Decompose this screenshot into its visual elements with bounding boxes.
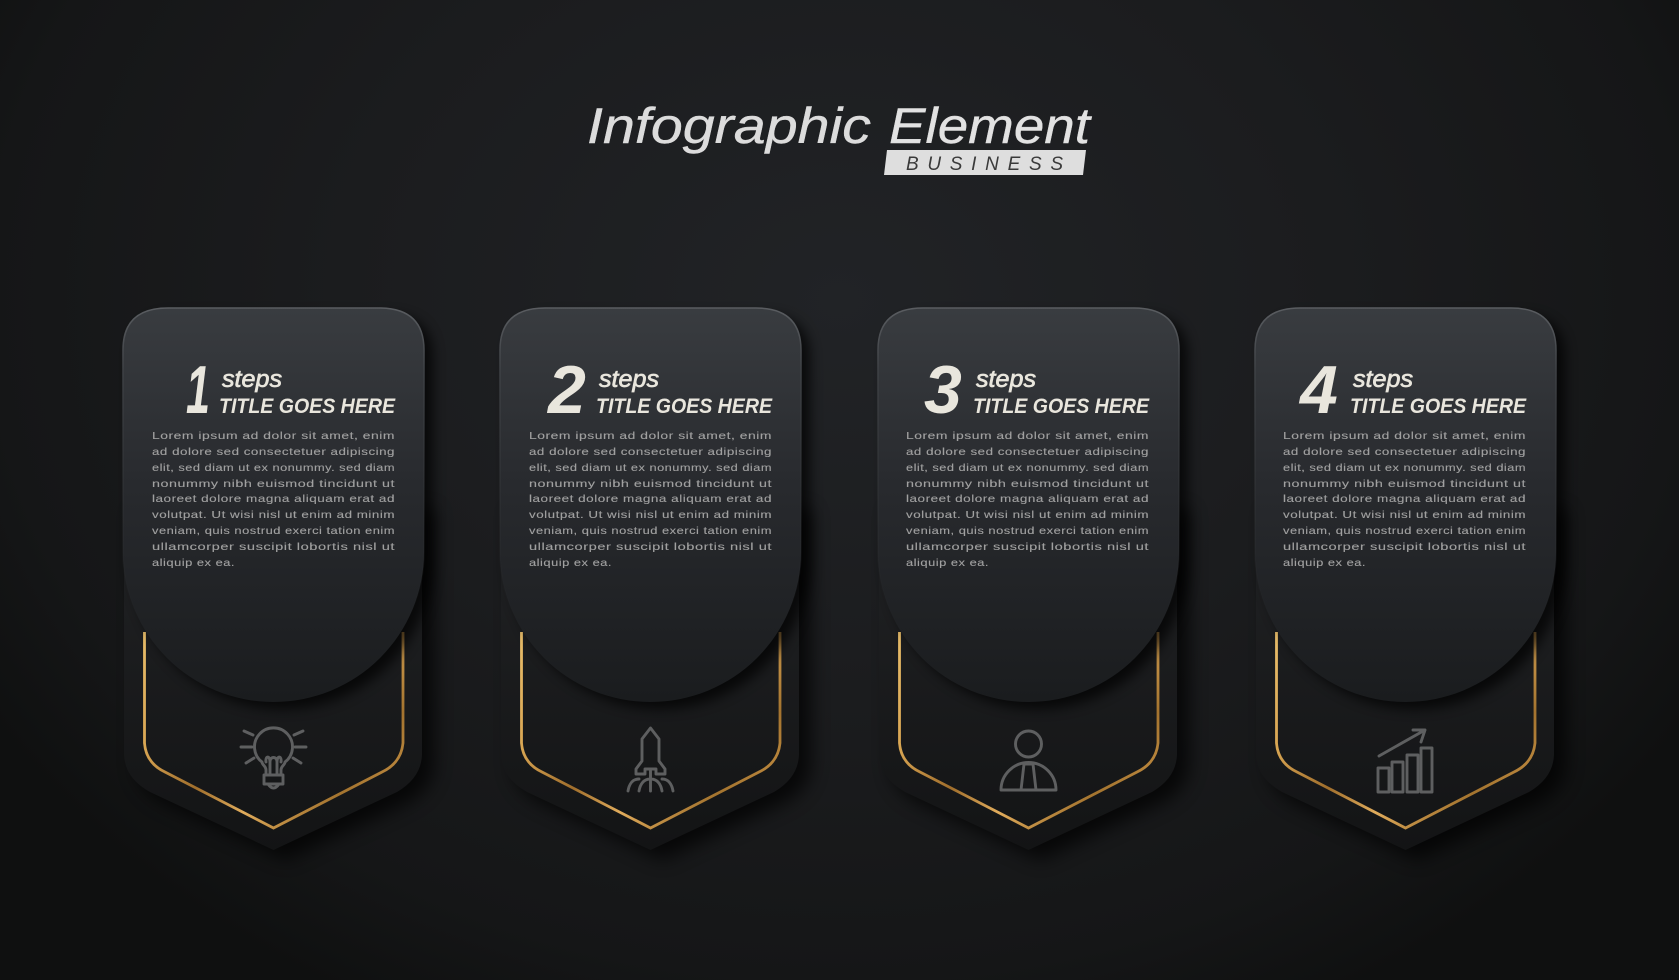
body text: ullamcorper suscipit lobortis nisl ut [529, 541, 772, 553]
body text: ullamcorper suscipit lobortis nisl ut [152, 541, 395, 553]
label: steps: steps [599, 366, 659, 393]
heading: title: TITLE GOES HERE [1350, 395, 1527, 418]
icon: rocket [628, 728, 673, 791]
body text: Lorem ipsum ad dolor sit amet, enim [906, 430, 1149, 442]
number 3: 3 [924, 352, 962, 428]
title: Element [889, 98, 1092, 154]
panel: step 1 [123, 308, 434, 860]
body text: ad dolore sed consectetuer adipiscing [1283, 446, 1526, 458]
body text [152, 430, 395, 569]
icon: business person [1001, 731, 1056, 790]
body text: nonummy nibh euismod tincidunt ut [906, 478, 1149, 490]
body text: laoreet dolore magna aliquam erat ad [529, 493, 772, 505]
body text: veniam, quis nostrud exerci tation enim [152, 525, 395, 537]
body text: veniam, quis nostrud exerci tation enim [529, 525, 772, 537]
body text: laoreet dolore magna aliquam erat ad [906, 493, 1149, 505]
heading: title: TITLE GOES HERE [596, 395, 773, 418]
body text: elit, sed diam ut ex nonummy. sed diam [906, 462, 1149, 474]
body text [906, 430, 1149, 569]
number 1: 1 [186, 352, 210, 428]
body text: volutpat. Ut wisi nisl ut enim ad minim [152, 509, 395, 521]
panel: step 2 [500, 308, 811, 860]
body text: laoreet dolore magna aliquam erat ad [1283, 493, 1526, 505]
label: steps: steps [1353, 366, 1413, 393]
body text: ad dolore sed consectetuer adipiscing [906, 446, 1149, 458]
title [587, 98, 1092, 154]
panel: step 3 [878, 308, 1189, 860]
body text: ad dolore sed consectetuer adipiscing [529, 446, 772, 458]
body text: aliquip ex ea. [906, 557, 989, 569]
body text: nonummy nibh euismod tincidunt ut [152, 478, 395, 490]
number 2: 2 [546, 352, 586, 428]
heading: title: TITLE GOES HERE [973, 395, 1150, 418]
body text: Lorem ipsum ad dolor sit amet, enim [529, 430, 772, 442]
body text: nonummy nibh euismod tincidunt ut [1283, 478, 1526, 490]
body text: laoreet dolore magna aliquam erat ad [152, 493, 395, 505]
subtitle banner [884, 150, 1086, 175]
body text: elit, sed diam ut ex nonummy. sed diam [529, 462, 772, 474]
body text: aliquip ex ea. [529, 557, 612, 569]
body text: elit, sed diam ut ex nonummy. sed diam [1283, 462, 1526, 474]
icon: growth chart [1378, 730, 1432, 792]
body text: volutpat. Ut wisi nisl ut enim ad minim [529, 509, 772, 521]
number 4: 4 [1298, 352, 1338, 428]
label: steps: steps [976, 366, 1036, 393]
body text: volutpat. Ut wisi nisl ut enim ad minim [906, 509, 1149, 521]
body text: volutpat. Ut wisi nisl ut enim ad minim [1283, 509, 1526, 521]
body text: Lorem ipsum ad dolor sit amet, enim [152, 430, 395, 442]
panel: step 4 [1255, 308, 1566, 860]
body text: ullamcorper suscipit lobortis nisl ut [1283, 541, 1526, 553]
body text: Lorem ipsum ad dolor sit amet, enim [1283, 430, 1526, 442]
heading: title: TITLE GOES HERE [219, 395, 396, 418]
body text: ullamcorper suscipit lobortis nisl ut [906, 541, 1149, 553]
body text: veniam, quis nostrud exerci tation enim [906, 525, 1149, 537]
subtitle banner: BUSINESS [906, 154, 1063, 175]
icon: light bulb [241, 728, 306, 788]
body text: ad dolore sed consectetuer adipiscing [152, 446, 395, 458]
body text: nonummy nibh euismod tincidunt ut [529, 478, 772, 490]
label: steps: steps [222, 366, 282, 393]
title: Infographic [587, 98, 871, 154]
body text [529, 430, 772, 569]
body text: elit, sed diam ut ex nonummy. sed diam [152, 462, 395, 474]
body text [1283, 430, 1526, 569]
body text: aliquip ex ea. [152, 557, 235, 569]
body text: aliquip ex ea. [1283, 557, 1366, 569]
body text: veniam, quis nostrud exerci tation enim [1283, 525, 1526, 537]
